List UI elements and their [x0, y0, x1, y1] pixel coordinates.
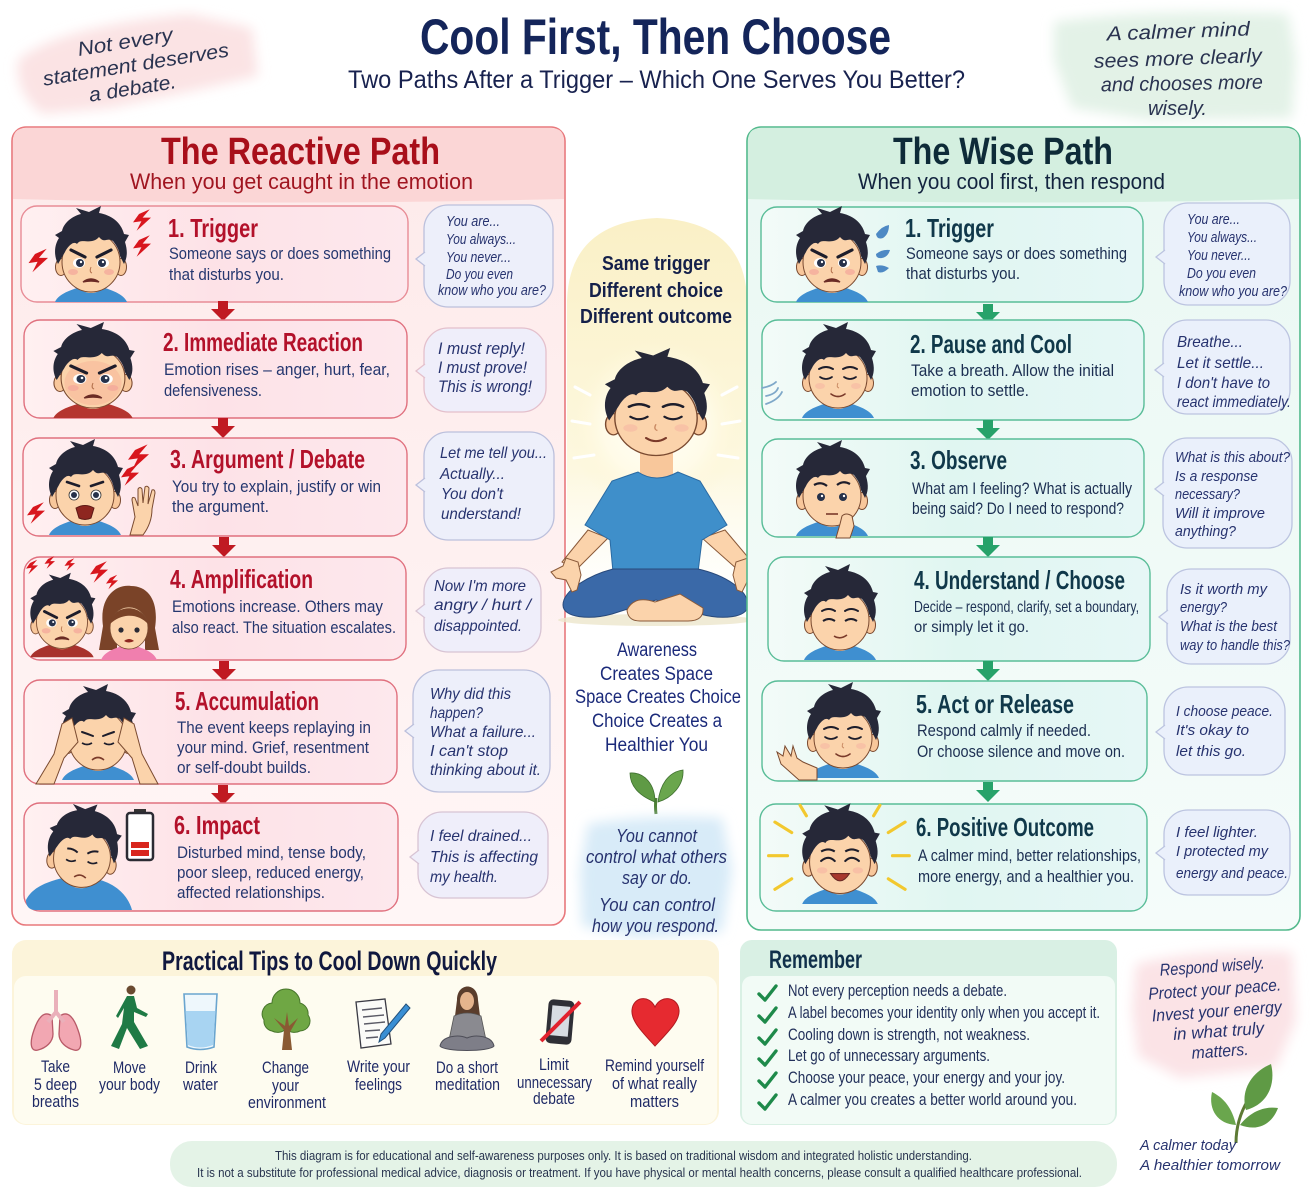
checklist: A label becomes your identity only when you accept it. [788, 1004, 1100, 1022]
step card: 3 argument debate [23, 438, 407, 536]
checklist: Let go of unnecessary arguments. [788, 1047, 990, 1065]
panel: centre column [551, 218, 763, 938]
arrow [212, 537, 236, 557]
heading: the wise path: When you cool first, then respond [858, 169, 1165, 194]
step card: 4 understand choose: 4. Understand / Choose [914, 565, 1125, 595]
title: Cool First, Then Choose [420, 9, 891, 65]
speech bubble: why did this happen: Why did this [430, 686, 511, 703]
tip: deep breaths [31, 990, 81, 1111]
tip: remind yourself [605, 999, 704, 1111]
figure: meditating person [551, 337, 763, 626]
note: not every statement: Not every [76, 24, 175, 61]
text: same trigger [580, 253, 732, 328]
arrow [211, 785, 235, 805]
tip: deep breaths: 5 deep [34, 1075, 77, 1094]
checklist: Not every perception needs a debate. [788, 982, 1007, 1000]
speech bubble: i feel lighter [1156, 810, 1290, 895]
tip: remind yourself: Remind yourself [605, 1056, 704, 1075]
speech bubble: you are: know who you are? [438, 282, 547, 299]
tip: remind yourself: of what really [612, 1074, 697, 1093]
step card: 3 argument debate: You try to explain, justify or win [172, 477, 381, 496]
speech bubble: i choose peace: I choose peace. [1176, 703, 1273, 720]
step card: 3 observe: What am I feeling? What is actually [912, 479, 1132, 498]
speech bubble: is it worth my energy [1159, 569, 1291, 664]
step card: 2 immediate reaction: Emotion rises – anger, hurt, fear, [164, 360, 390, 379]
step card: 5 accumulation: 5. Accumulation [175, 686, 319, 716]
icon: reflective boy [804, 564, 878, 660]
step card: 6 positive outcome: A calmer mind, better relationships, [918, 846, 1141, 865]
arrow [976, 304, 1000, 324]
speech bubble: what is this about: anything? [1175, 523, 1237, 540]
text: same trigger: Different outcome [580, 306, 732, 328]
speech bubble: i choose peace: let this go. [1176, 743, 1246, 760]
step card: 4 amplification: 4. Amplification [170, 564, 313, 594]
speech bubble: what is this about: What is this about? [1175, 449, 1291, 466]
note: a calmer mind: A calmer mind [1105, 18, 1251, 46]
arrow [211, 301, 235, 321]
tip: do a short meditation: Do a short [436, 1058, 498, 1077]
icon: furious boy [53, 322, 135, 418]
heading: the wise path: The Wise Path [893, 131, 1113, 173]
speech bubble: i choose peace [1156, 687, 1285, 775]
speech bubble: i feel lighter: I feel lighter. [1176, 824, 1258, 841]
icon: sprout [630, 770, 683, 814]
note: a calmer mind: sees more clearly [1093, 45, 1263, 73]
text: awareness creates space: Choice Creates a [592, 711, 722, 732]
tip: limit unnecessary debate: debate [533, 1089, 575, 1108]
icon: thinking boy [796, 440, 870, 538]
note: you cannot control: how you respond. [592, 916, 719, 936]
heading: the reactive path [130, 131, 473, 194]
heading: the reactive path: The Reactive Path [161, 131, 440, 173]
speech bubble: what is this about: Is a response [1175, 468, 1258, 485]
tip: move your body: Move [113, 1058, 146, 1077]
note: you cannot control [580, 817, 732, 938]
speech bubble: now i'm more: disappointed. [434, 618, 522, 635]
tip: do a short meditation [435, 986, 500, 1094]
step card: 4 understand choose [768, 557, 1150, 661]
speech bubble: breathe: react immediately. [1177, 394, 1291, 411]
arrow [212, 661, 236, 681]
note: a calmer mind: wisely. [1148, 98, 1207, 120]
tip: write your feelings: Write your [347, 1057, 410, 1076]
icon: angry boy [28, 206, 151, 302]
step card: 1 trigger: 1. Trigger [168, 213, 258, 243]
note: a calmer today [1139, 1137, 1281, 1174]
step card: 6 positive outcome: more energy, and a healthier you. [918, 867, 1134, 886]
speech bubble: i must reply [416, 328, 546, 412]
heading: the wise path [858, 131, 1165, 194]
step card: 1 trigger [21, 206, 408, 302]
speech bubble: what is this about: necessary? [1175, 486, 1241, 503]
step card: 6 impact: affected relationships. [177, 883, 325, 902]
note: you cannot control: control what others [586, 847, 727, 867]
step card: 2 pause and cool: 2. Pause and Cool [910, 329, 1072, 359]
speech bubble: you are: You are... [446, 213, 500, 230]
step card: 5 act or release: Respond calmly if needed. [917, 721, 1091, 740]
step card: 3 observe: being said? Do I need to respond? [912, 499, 1124, 518]
panel: practical tips: Practical Tips to Cool Down Quickly [162, 946, 497, 976]
icon: low battery [127, 809, 153, 860]
step card: 2 immediate reaction: 2. Immediate Reaction [163, 327, 363, 357]
step card: 2 pause and cool: emotion to settle. [911, 381, 1029, 400]
step card: 4 understand choose: or simply let it go. [914, 619, 1029, 636]
step card: 4 understand choose: Decide – respond, clarify, set a boundary, [914, 599, 1139, 616]
title [348, 9, 965, 94]
text: awareness creates space: Awareness [617, 640, 697, 661]
speech bubble: i feel drained: my health. [430, 869, 498, 886]
speech bubble: you are: You never... [1187, 247, 1251, 264]
speech bubble: breathe: Breathe... [1177, 334, 1243, 351]
step card: 3 argument debate: the argument. [172, 497, 269, 516]
speech bubble: is it worth my energy: way to handle this? [1180, 637, 1291, 654]
note: a calmer today: A healthier tomorrow [1139, 1157, 1281, 1174]
text: awareness creates space: Creates Space [600, 664, 713, 685]
note: you cannot control: You can control [599, 895, 716, 915]
speech bubble: you are [416, 205, 553, 307]
step card: 4 amplification: Emotions increase. Others may [172, 597, 383, 616]
icon: smiling boy with rays [769, 803, 909, 904]
speech bubble: i feel lighter: I protected my [1176, 843, 1269, 860]
speech bubble: you are: You always... [1187, 229, 1257, 246]
note: respond wisely: in what truly [1173, 1019, 1266, 1044]
icon: boy and girl arguing [26, 556, 159, 660]
speech bubble: i feel drained: This is affecting [430, 849, 538, 866]
step card: 5 act or release: 5. Act or Release [916, 689, 1074, 719]
speech bubble: what is this about [1155, 438, 1292, 548]
step card: 5 act or release: Or choose silence and move on. [917, 742, 1125, 761]
panel: practical tips [12, 940, 719, 1125]
step card: 5 accumulation: The event keeps replaying in [177, 718, 371, 737]
step card: 1 trigger: that disturbs you. [906, 264, 1020, 283]
speech bubble: now i'm more: angry / hurt / [434, 597, 533, 614]
icon: drained boy [26, 800, 132, 910]
step card: 2 immediate reaction: defensiveness. [164, 381, 262, 400]
panel: the reactive path [12, 127, 565, 925]
step card: 2 pause and cool: Take a breath. Allow the initial [911, 361, 1114, 380]
speech bubble: is it worth my energy: What is the best [1180, 618, 1278, 635]
speech bubble: i feel lighter: energy and peace. [1176, 865, 1288, 882]
tip: write your feelings: feelings [355, 1075, 402, 1094]
speech bubble: you are: You never... [446, 249, 511, 266]
note: respond wisely [1132, 951, 1296, 1078]
step card: 2 immediate reaction [24, 320, 407, 418]
title: Two Paths After a Trigger – Which One Serves You Better? [348, 66, 965, 94]
tip: limit unnecessary debate [517, 999, 592, 1108]
tip: write your feelings [347, 999, 410, 1094]
step card: 6 impact: Disturbed mind, tense body, [177, 843, 366, 862]
arrow [211, 418, 235, 438]
speech bubble: i choose peace: It's okay to [1176, 722, 1249, 739]
note: not every statement [18, 14, 258, 114]
speech bubble: why did this happen: thinking about it. [430, 762, 541, 779]
tip: move your body [99, 986, 160, 1094]
note: respond wisely: Respond wisely. [1159, 954, 1265, 980]
speech bubble: why did this happen: What a failure... [430, 724, 536, 741]
tip: deep breaths: Take [41, 1057, 70, 1076]
step card: 3 observe: 3. Observe [910, 445, 1007, 475]
step card: 1 trigger: 1. Trigger [905, 213, 994, 243]
step card: 4 amplification: also react. The situation escalates. [172, 618, 396, 637]
tip: change your environment: environment [248, 1093, 326, 1112]
step card: 5 accumulation: your mind. Grief, resentment [177, 738, 369, 757]
speech bubble: breathe [1155, 320, 1291, 414]
speech bubble: let me tell you: understand! [441, 506, 522, 523]
tip: drink water [182, 994, 218, 1094]
speech bubble: let me tell you: Let me tell you... [440, 445, 547, 462]
speech bubble: let me tell you: Actually... [439, 466, 505, 483]
step card: 3 argument debate: 3. Argument / Debate [170, 444, 365, 474]
step card: 3 observe [762, 439, 1144, 538]
tip: drink water: water [182, 1075, 218, 1094]
icon: arguing boy with raised hand [27, 439, 155, 535]
tip: limit unnecessary debate: unnecessary [517, 1073, 592, 1092]
speech bubble: you are [1156, 203, 1290, 305]
speech bubble: let me tell you: You don't [441, 486, 504, 503]
panel: the wise path [747, 127, 1300, 930]
step card: 1 trigger: Someone says or does something [169, 244, 391, 263]
speech bubble: why did this happen: happen? [430, 705, 483, 722]
speech bubble: i feel drained: I feel drained... [430, 828, 532, 845]
tip: deep breaths: breaths [32, 1092, 79, 1111]
text: same trigger: Same trigger [602, 253, 710, 275]
step card: 6 impact [24, 800, 398, 911]
step card: 6 positive outcome: 6. Positive Outcome [916, 812, 1094, 842]
disclaimer [170, 1141, 1117, 1187]
tip: drink water: Drink [185, 1058, 217, 1077]
step card: 6 impact: poor sleep, reduced energy, [177, 863, 364, 882]
speech bubble: you are: Do you even [1187, 265, 1256, 282]
tip: change your environment: your [272, 1076, 299, 1095]
icon: calm boy with open hand [777, 682, 881, 780]
checklist: Choose your peace, your energy and your joy. [788, 1069, 1065, 1087]
speech bubble: you are: You always... [446, 231, 516, 248]
icon: boy breathing out [762, 322, 876, 418]
step card: 1 trigger: that disturbs you. [169, 265, 284, 284]
step card: 5 act or release [762, 681, 1147, 781]
speech bubble: you are: know who you are? [1179, 283, 1288, 300]
icon: boy holding head [36, 684, 158, 784]
speech bubble: why did this happen [405, 670, 550, 792]
tip: remind yourself: matters [630, 1092, 679, 1111]
step card: 2 pause and cool [762, 320, 1144, 420]
panel: remember: Remember [769, 946, 862, 974]
speech bubble: breathe: I don't have to [1177, 375, 1270, 392]
speech bubble: i must reply: I must reply! [438, 339, 525, 358]
tip: change your environment: Change [262, 1058, 309, 1077]
step card: 5 accumulation: or self-doubt builds. [177, 758, 311, 777]
icon: upset boy with droplets [796, 206, 890, 302]
arrow [976, 537, 1000, 557]
icon: plant [1211, 1064, 1278, 1143]
speech bubble: why did this happen: I can't stop [430, 743, 508, 760]
tip: limit unnecessary debate: Limit [539, 1055, 569, 1074]
step card: 5 accumulation [24, 680, 397, 784]
speech bubble: i feel drained [410, 812, 548, 898]
arrow [976, 782, 1000, 802]
tip: do a short meditation: meditation [435, 1075, 500, 1094]
checklist: A calmer you creates a better world around you. [788, 1091, 1077, 1109]
step card: 1 trigger [761, 206, 1143, 302]
note: a calmer today: A calmer today [1139, 1137, 1237, 1154]
disclaimer: This diagram is for educational and self-awareness purposes only. It is based on traditional wisdom and integrated holistic understanding. [275, 1148, 972, 1163]
speech bubble: is it worth my energy: Is it worth my [1180, 581, 1268, 598]
speech bubble: breathe: Let it settle... [1177, 355, 1264, 372]
note: you cannot control: You cannot [616, 826, 698, 846]
text: awareness creates space: Healthier You [605, 735, 708, 756]
note: not every statement: a debate. [87, 71, 178, 107]
panel: remember [740, 940, 1117, 1125]
heading: the reactive path: When you get caught in the emotion [130, 169, 473, 194]
note: respond wisely: Protect your peace. [1148, 975, 1282, 1004]
speech bubble: now i'm more [416, 568, 541, 652]
note: a calmer mind: and chooses more [1101, 72, 1263, 96]
speech bubble: is it worth my energy: energy? [1180, 599, 1228, 616]
note: you cannot control: say or do. [622, 868, 692, 888]
step card: 6 impact: 6. Impact [174, 810, 260, 840]
note: not every statement: statement deserves [41, 40, 230, 91]
step card: 6 positive outcome [760, 803, 1147, 911]
step card: 1 trigger: Someone says or does something [906, 244, 1127, 263]
step card: 4 amplification [24, 556, 406, 660]
speech bubble: i must reply: This is wrong! [438, 377, 532, 396]
checklist [759, 982, 1100, 1109]
speech bubble: i must reply: I must prove! [438, 358, 527, 377]
note: a calmer mind [1054, 12, 1296, 120]
text: awareness creates space [575, 640, 741, 756]
tip: move your body: your body [99, 1075, 160, 1094]
arrow [976, 661, 1000, 681]
text: same trigger: Different choice [589, 280, 723, 302]
arrow [976, 420, 1000, 440]
tip: change your environment [248, 989, 326, 1112]
note: respond wisely: matters. [1191, 1040, 1249, 1063]
speech bubble: you are: Do you even [446, 266, 513, 283]
speech bubble: you are: You are... [1187, 211, 1240, 228]
speech bubble: what is this about: Will it improve [1175, 505, 1265, 522]
speech bubble: let me tell you [416, 432, 554, 540]
note: respond wisely: Invest your energy [1151, 997, 1284, 1025]
speech bubble: now i'm more: Now I'm more [434, 578, 526, 595]
text: awareness creates space: Space Creates Choice [575, 687, 741, 708]
checklist: Cooling down is strength, not weakness. [788, 1026, 1030, 1044]
disclaimer: It is not a substitute for professional medical advice, diagnosis or treatment. If you have physical or mental health concerns, please consult a qualified healthcare professional. [197, 1165, 1082, 1180]
